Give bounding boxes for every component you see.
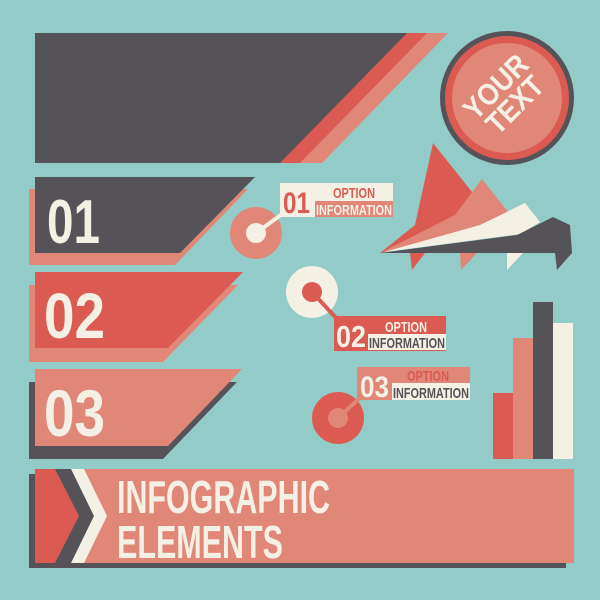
bar chart bbox=[493, 302, 573, 459]
option 02: INFORMATION bbox=[369, 335, 445, 352]
option 03 bbox=[312, 367, 470, 444]
row 03: 03 bbox=[44, 376, 105, 450]
badge: your text: YOUR bbox=[457, 48, 536, 127]
row 02 bbox=[29, 272, 243, 362]
option 01: 01 bbox=[283, 187, 310, 220]
option 02: OPTION bbox=[385, 319, 427, 336]
title banner bbox=[29, 469, 574, 568]
title banner: INFOGRAPHIC bbox=[117, 471, 330, 523]
row 01 bbox=[29, 177, 255, 265]
row 02: 02 bbox=[44, 280, 105, 352]
option 01 bbox=[230, 183, 393, 259]
badge: your text: TEXT bbox=[480, 70, 551, 141]
mountain chart bbox=[380, 143, 572, 270]
option 03: 03 bbox=[360, 371, 389, 404]
row 01: 01 bbox=[47, 188, 100, 257]
option 03: INFORMATION bbox=[393, 385, 469, 402]
option 02: 02 bbox=[336, 319, 366, 354]
option 02 bbox=[286, 266, 446, 354]
top banner bbox=[35, 33, 448, 163]
option 01: OPTION bbox=[333, 185, 375, 202]
option 01: INFORMATION bbox=[316, 202, 392, 219]
option 03: OPTION bbox=[407, 368, 449, 385]
badge: your text bbox=[440, 31, 574, 165]
title banner: ELEMENTS bbox=[117, 516, 283, 568]
row 03 bbox=[29, 369, 242, 459]
